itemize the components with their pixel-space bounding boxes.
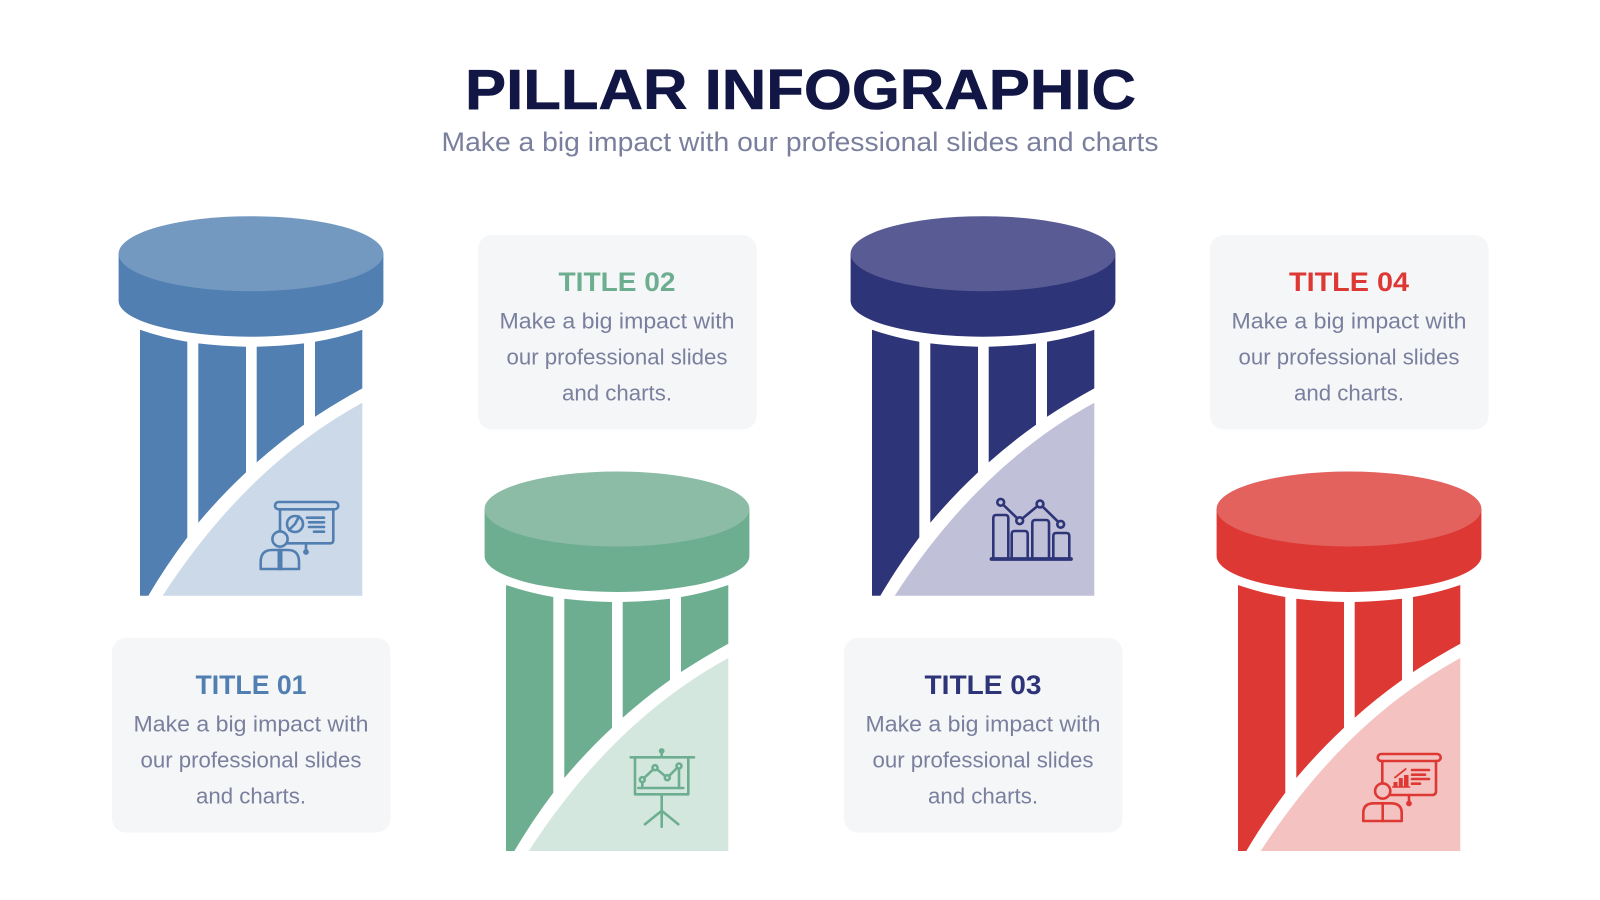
card 4: TITLE 04 [1289,267,1409,297]
pillar 2: green [485,472,749,851]
card 4: and charts. [1294,380,1404,405]
pillar 4 cap [1217,472,1481,592]
card 2: and charts. [562,380,672,405]
pillar 1 cap [119,216,383,337]
pillar 3 shaft flutes [872,330,1094,596]
card 4: Make a big impact with [1232,308,1466,333]
pillar 3 light base [895,403,1094,596]
card 2: our professional slides [506,344,728,370]
pillar 4 light base [1261,658,1460,851]
pillar 1 shaft flutes [140,330,362,596]
icon: bar and line chart [992,499,1071,559]
card 1 [112,638,391,832]
pillar 3: navy [851,216,1115,596]
card 3: TITLE 03 [924,670,1042,700]
card 4: our professional slides [1238,344,1460,370]
card 1: our professional slides [140,748,362,772]
pillar 2 light base [529,658,728,851]
pillar 3 cap [851,216,1115,337]
card 1: and charts. [196,783,306,808]
title: PILLAR INFOGRAPHIC [465,58,1136,122]
card 2: Make a big impact with [500,308,734,333]
pillar 1 light base [163,403,362,596]
pillar 2 cap [485,472,749,592]
card 1: TITLE 01 [196,670,306,700]
icon: chart on easel [631,749,694,827]
icon: presenter with growth chart [1363,754,1441,821]
card 3: Make a big impact with [866,711,1100,736]
card 1: Make a big impact with [134,711,368,736]
icon: presenter with pie chart [261,502,338,569]
card 3 [844,638,1123,832]
card 2 [478,235,757,430]
card 3: our professional slides [872,748,1094,772]
pillar 4: red [1217,472,1481,851]
pillar 4 shaft flutes [1238,585,1460,851]
pillar 2 shaft flutes [506,585,728,851]
card 2: TITLE 02 [558,267,676,297]
card 4 [1210,235,1489,430]
pillar 1: blue [119,216,383,596]
card 3: and charts. [928,783,1038,808]
subtitle: Make a big impact with our professional slides and charts [442,127,1158,157]
